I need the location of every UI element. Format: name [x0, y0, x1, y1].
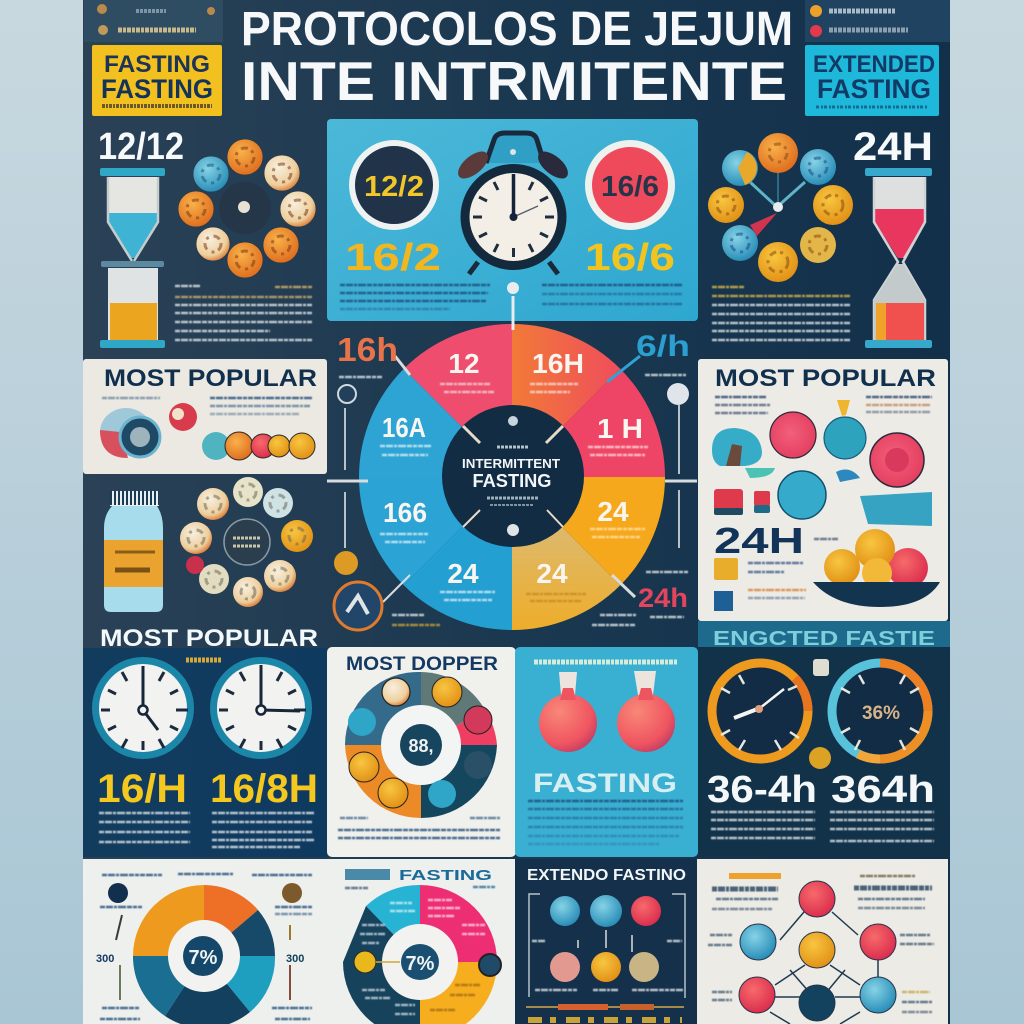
text block: 12/12 notes — [175, 286, 312, 340]
label: 24H: 24H — [714, 520, 804, 561]
icon: hourglass 12/12 — [100, 168, 165, 348]
dial: 12/2: 12/2 — [364, 171, 424, 203]
header: legend left — [84, 0, 223, 42]
icons and labels: donut 1 sides: 300 — [96, 953, 114, 965]
wheel labels: 24 — [447, 558, 479, 589]
panel: wheel chart 1 — [83, 859, 327, 1024]
dial: 12/2 — [349, 140, 439, 230]
text block: 16/2 notes — [340, 285, 490, 309]
text block: node labels — [532, 941, 683, 990]
icon: flask 1 — [539, 672, 597, 752]
heading: 24H: 24H — [853, 125, 933, 169]
text block: popular notes — [102, 398, 312, 414]
labels: 36-4h and 364h: 36-4h — [707, 769, 817, 811]
chart: donut 1 — [133, 885, 275, 1024]
text block: 16/6 notes — [542, 285, 683, 304]
connector: top — [507, 282, 519, 330]
text block: panel notes — [714, 397, 932, 611]
heading: fasting: FASTING — [533, 768, 677, 798]
text block: donut 1 notes — [100, 874, 312, 1019]
panel: network nodes — [697, 859, 948, 1024]
wheel labels: 16A — [382, 412, 426, 443]
labels: 36-4h and 364h: 364h — [831, 769, 935, 811]
icon: food cluster — [100, 403, 197, 458]
title — [241, 3, 793, 112]
wheel labels: 16H — [532, 348, 584, 379]
title: INTE INTRMITENTE — [241, 50, 787, 112]
gauge 2: 36% — [862, 703, 900, 724]
chart: donut 1: 7% — [189, 947, 218, 969]
heading: 12/12: 12/12 — [98, 126, 184, 168]
heading: fasting — [345, 867, 492, 884]
wheel labels: 1 H — [597, 413, 643, 444]
icon ring: supplements — [180, 477, 313, 607]
wheel labels: 24 — [597, 496, 629, 527]
label: 6/h: 6/h — [636, 330, 690, 363]
icon: alarm clock — [453, 133, 573, 274]
icon: hourglass 24H — [865, 168, 932, 348]
text block: dopper notes — [338, 818, 500, 838]
labels: 36-4h and 364h — [707, 769, 935, 811]
chart: icon wheel — [345, 672, 497, 818]
title: PROTOCOLOS DE JEJUM — [241, 3, 793, 56]
chart: central fasting wheel — [359, 324, 665, 630]
icons and labels: donut 1 sides: 300 — [286, 953, 304, 965]
text block: fasting notes — [528, 801, 683, 844]
panel: fasting flasks — [515, 647, 698, 857]
band: extended fasting heading: ENGCTED FASTIE — [713, 628, 935, 650]
icon: round badge — [334, 582, 382, 630]
band: extended fasting heading — [698, 621, 950, 650]
text block: wheel side notes — [339, 375, 688, 625]
side pins right — [667, 383, 689, 548]
network nodes — [739, 881, 896, 1021]
icon: bowl of fruit — [813, 529, 940, 607]
icon: clock 1 — [92, 657, 194, 759]
gauge 2 — [832, 663, 928, 759]
panel: most popular right: MOST POPULAR — [715, 365, 936, 392]
text block: network notes — [708, 873, 934, 1012]
badge: fasting — [92, 45, 222, 116]
network links — [770, 912, 878, 1024]
text block: 24H notes — [712, 287, 850, 340]
panel: most popular left: MOST POPULAR — [104, 365, 317, 392]
icon: supplement bottle — [104, 491, 163, 612]
wheel labels: 166 — [383, 497, 427, 528]
text block: gauge notes — [711, 812, 934, 841]
panel: wheel chart 2 — [327, 859, 515, 1024]
label: 16h: 16h — [337, 331, 398, 368]
icons: gauge badges — [809, 659, 831, 769]
header: legend right — [805, 0, 950, 42]
badge: fasting: FASTING — [104, 51, 210, 78]
chart: donut 2 — [343, 885, 501, 1024]
connectors: left and right — [327, 356, 697, 602]
icons: pink and blue discs — [712, 400, 932, 526]
dial: 16/6 — [585, 140, 675, 230]
badge: extended fasting: FASTING — [817, 74, 931, 104]
icon ring: 12/12 foods — [178, 139, 316, 278]
wheel labels: 24 — [536, 558, 568, 589]
icons and labels: donut 1 sides — [96, 883, 304, 1000]
icon: flask 2 — [617, 671, 675, 752]
panel: clock and 12/2, 16/6 — [327, 119, 698, 321]
gauge 1 — [712, 663, 808, 759]
icon: clock 2 — [210, 657, 312, 759]
panel: 36-4h gauges — [698, 647, 950, 857]
icon row: pills — [202, 432, 315, 460]
wheel small text — [380, 384, 648, 601]
wheel centre label: FASTING — [472, 471, 552, 491]
panel: most popular right — [698, 359, 948, 621]
badge: extended fasting — [805, 45, 939, 116]
labels: 16/H and 16/8H: 16/8H — [210, 767, 318, 811]
wheel labels — [382, 348, 643, 589]
labels: 16/H and 16/8H: 16/H — [97, 767, 187, 811]
icon ring: 24H foods — [708, 133, 853, 282]
wheel labels: 12 — [448, 348, 480, 379]
chart: icon wheel: 88, — [408, 736, 434, 756]
text block: clock notes — [99, 813, 315, 847]
panel: most dopper — [327, 647, 516, 857]
dial: 16/6: 16/6 — [601, 171, 659, 203]
colour bar — [526, 1004, 684, 1020]
heading: most popular: MOST POPULAR — [100, 625, 318, 652]
node grid — [550, 895, 661, 982]
labels: 16/H and 16/8H — [97, 767, 318, 811]
label: 24h: 24h — [638, 583, 688, 613]
heading: fasting: FASTING — [399, 867, 492, 884]
bracket frame — [529, 894, 685, 998]
side pins left — [334, 385, 358, 575]
panel: extended fasting nodes: EXTENDO FASTINO — [527, 867, 686, 884]
panel: most dopper: MOST DOPPER — [346, 654, 498, 675]
label: 16/6: 16/6 — [585, 237, 675, 279]
wheel centre label — [462, 456, 560, 491]
badge: fasting: FASTING — [101, 74, 213, 104]
panel: extended fasting nodes — [515, 859, 697, 1024]
chart: donut 2: 7% — [406, 953, 435, 975]
label: 16/2: 16/2 — [345, 237, 441, 279]
panel: most popular left — [83, 359, 327, 474]
wheel centre label: INTERMITTENT — [462, 456, 560, 471]
panel: 16/8 clocks — [83, 648, 327, 857]
badge: extended fasting: EXTENDED — [813, 51, 935, 78]
text block: donut 2 segments — [345, 887, 495, 1014]
